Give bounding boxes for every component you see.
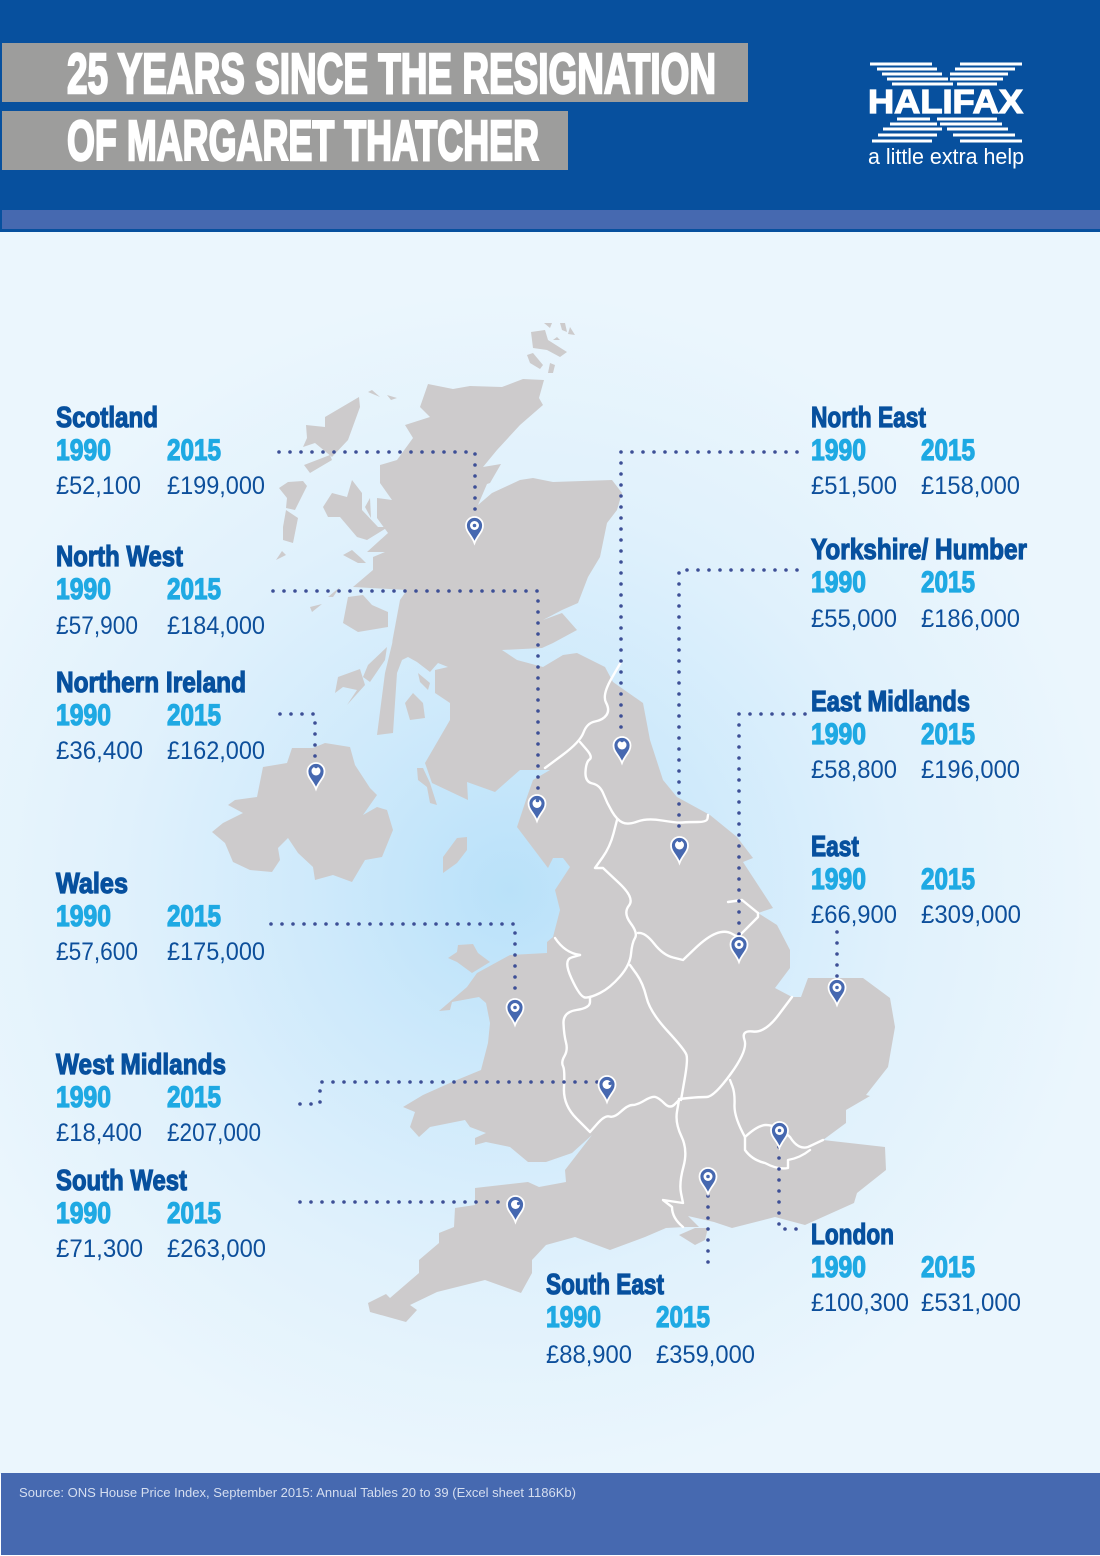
label: North West: £184,000 <box>167 612 265 640</box>
label: South West <box>56 1165 266 1263</box>
label: North East: £51,500 <box>811 472 897 500</box>
label: North West: £57,900 <box>56 612 138 640</box>
label: North East: 2015 <box>921 434 975 467</box>
title line 1 <box>2 42 748 106</box>
regional borders <box>545 662 823 1227</box>
label: Wales: £57,600 <box>56 938 138 966</box>
label: East Midlands: £58,800 <box>811 756 897 784</box>
map: Isle of Man <box>443 837 467 873</box>
label: South East: South East <box>546 1269 664 1301</box>
label: North West <box>56 541 265 640</box>
label: West Midlands: 2015 <box>167 1081 221 1114</box>
label: East Midlands <box>811 686 1020 784</box>
label: Scotland: £52,100 <box>56 472 141 500</box>
label: Scotland: Scotland <box>56 402 158 434</box>
title line 2 <box>2 109 568 173</box>
label: Wales <box>56 868 265 966</box>
label: East Midlands: £196,000 <box>921 756 1020 784</box>
pin: Northern Ireland <box>308 763 324 789</box>
label: South West: South West <box>56 1165 187 1197</box>
label: Yorkshire/ Humber: 1990 <box>811 566 866 599</box>
logo tagline: a little extra help <box>868 144 1024 169</box>
label: Northern Ireland: 2015 <box>167 699 221 732</box>
label: East Midlands: East Midlands <box>811 686 970 718</box>
label: Scotland <box>56 402 265 500</box>
map: Anglesey <box>448 944 490 973</box>
UK map <box>212 323 895 1322</box>
title line 1: 25 YEARS SINCE THE RESIGNATION <box>67 42 716 106</box>
label: London: £531,000 <box>921 1289 1021 1317</box>
pin: East <box>828 979 846 1005</box>
label: East: 2015 <box>921 863 975 896</box>
label: South East: £88,900 <box>546 1341 632 1369</box>
title line 2: OF MARGARET THATCHER <box>67 109 539 173</box>
label: Yorkshire/ Humber <box>811 534 1027 633</box>
pin: South West <box>507 1196 524 1222</box>
label: Yorkshire/ Humber: £55,000 <box>811 605 897 633</box>
label: North West: North West <box>56 541 183 573</box>
pin: East Midlands <box>730 936 748 962</box>
label: North East <box>811 402 1020 500</box>
label: Scotland: 2015 <box>167 434 221 467</box>
label: South West: 1990 <box>56 1197 111 1230</box>
label: North East: North East <box>811 402 926 434</box>
label: London: 2015 <box>921 1251 975 1284</box>
footer bar <box>1 1473 1100 1555</box>
label: London: £100,300 <box>811 1289 909 1317</box>
map: Great Britain mainland <box>353 379 895 1322</box>
label: North West: 1990 <box>56 573 111 606</box>
icon: striped X <box>870 64 1022 141</box>
label: West Midlands <box>56 1049 261 1147</box>
label: East: 1990 <box>811 863 866 896</box>
map: Northern Ireland <box>212 743 393 882</box>
label: London <box>811 1219 1021 1317</box>
label: West Midlands: West Midlands <box>56 1049 226 1081</box>
label: West Midlands: £18,400 <box>56 1119 142 1147</box>
label: Northern Ireland <box>56 667 265 765</box>
pin: North East <box>614 737 630 763</box>
label: Wales: 2015 <box>167 900 221 933</box>
pin: Scotland <box>466 517 483 543</box>
label: South East <box>546 1269 755 1369</box>
label: Northern Ireland: £36,400 <box>56 737 143 765</box>
map: Scottish islands <box>276 323 575 805</box>
label: London: London <box>811 1219 894 1251</box>
label: Scotland: 1990 <box>56 434 111 467</box>
label: South East: £359,000 <box>656 1341 755 1369</box>
label: Northern Ireland: 1990 <box>56 699 111 732</box>
label: London: 1990 <box>811 1251 866 1284</box>
label: East Midlands: 1990 <box>811 718 866 751</box>
label: West Midlands: £207,000 <box>167 1119 261 1147</box>
header banner <box>0 0 1100 232</box>
region price labels <box>56 402 1027 1369</box>
pin: North West <box>528 795 546 821</box>
pin: Yorkshire and Humber <box>671 837 688 863</box>
label: Wales: £175,000 <box>167 938 265 966</box>
label: East: £66,900 <box>811 901 897 929</box>
label: North East: 1990 <box>811 434 866 467</box>
map pins <box>308 517 846 1222</box>
label: South East: 1990 <box>546 1301 601 1334</box>
pin: West Midlands <box>598 1076 616 1102</box>
label: South East: 2015 <box>656 1301 710 1334</box>
map: Isle of Wight <box>679 1228 708 1245</box>
label: South West: £263,000 <box>167 1235 266 1263</box>
label: South West: 2015 <box>167 1197 221 1230</box>
logo: Halifax <box>868 64 1024 169</box>
pin: Wales <box>506 999 524 1025</box>
label: Yorkshire/ Humber: Yorkshire/ Humber <box>811 534 1027 566</box>
label: Scotland: £199,000 <box>167 472 265 500</box>
label: Wales: Wales <box>56 868 128 900</box>
label: North East: £158,000 <box>921 472 1020 500</box>
label: East Midlands: 2015 <box>921 718 975 751</box>
label: East <box>811 831 1021 929</box>
label: South West: £71,300 <box>56 1235 143 1263</box>
background panel <box>0 230 1100 1474</box>
label: East: East <box>811 831 859 863</box>
label: Yorkshire/ Humber: £186,000 <box>921 605 1020 633</box>
pin: London <box>771 1122 788 1148</box>
label: North West: 2015 <box>167 573 221 606</box>
label: Northern Ireland: Northern Ireland <box>56 667 246 699</box>
label: West Midlands: 1990 <box>56 1081 111 1114</box>
label: Wales: 1990 <box>56 900 111 933</box>
logo wordmark: HALIFAX <box>868 83 1023 120</box>
label: Northern Ireland: £162,000 <box>167 737 265 765</box>
dotted leader lines <box>271 452 837 1262</box>
title <box>2 42 748 173</box>
label: Yorkshire/ Humber: 2015 <box>921 566 975 599</box>
pin: South East <box>700 1168 716 1194</box>
source note: Source: ONS House Price Index, September 2015: Annual Tables 20 to 39 (Excel sheet 1186Kb) <box>19 1485 576 1500</box>
label: East: £309,000 <box>921 901 1021 929</box>
